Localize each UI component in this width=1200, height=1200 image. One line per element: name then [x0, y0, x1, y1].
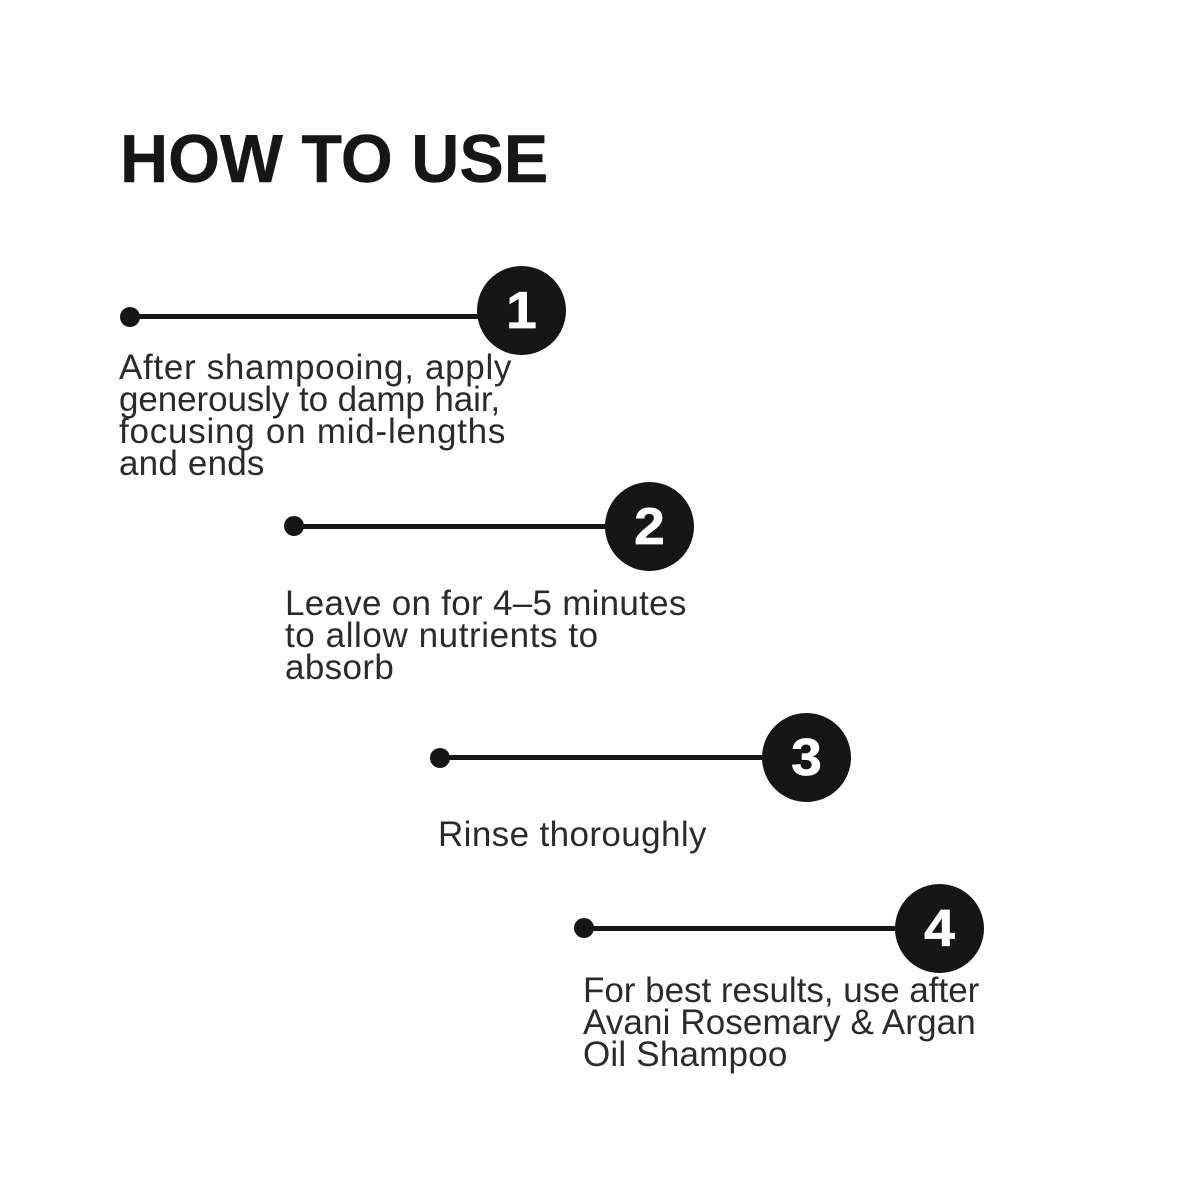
step 4 text: Oil Shampoo: [583, 1035, 788, 1074]
step 1 text: and ends: [119, 444, 265, 483]
step 1 number badge: 1: [506, 282, 537, 340]
step 2 number badge: 2: [634, 498, 665, 556]
step 2 line: [294, 524, 624, 529]
step 4 text: For best results, use after: [583, 971, 979, 1010]
step 2 text: to allow nutrients to: [285, 616, 599, 655]
step 3 connector: [430, 713, 851, 802]
step 3 number badge: 3: [791, 729, 822, 787]
step 4 number badge: 4: [924, 900, 955, 958]
step 4 dot: [574, 918, 594, 938]
step 1 text: focusing on mid-lengths: [119, 412, 506, 451]
step 2 dot: [284, 516, 304, 536]
step 4 line: [584, 926, 914, 931]
step 1 dot: [120, 307, 140, 327]
step 2 text: absorb: [285, 648, 394, 687]
step 4 connector: [574, 884, 984, 973]
step 3 number badge: [762, 713, 851, 802]
step 1 text: generously to damp hair,: [119, 380, 500, 419]
step 4 text: [583, 971, 979, 1074]
step 2 connector: [284, 482, 694, 571]
step 1 number badge: [477, 266, 566, 355]
step 1 text: [119, 348, 512, 483]
step 1 text: After shampooing, apply: [119, 348, 512, 387]
title: HOW TO USE: [120, 121, 548, 197]
step 3 text: Rinse thoroughly: [438, 815, 707, 854]
step 1 connector: [120, 266, 566, 355]
step 4 number badge: [895, 884, 984, 973]
step 4 text: Avani Rosemary & Argan: [583, 1003, 976, 1042]
step 2 number badge: [605, 482, 694, 571]
step 2 text: [285, 584, 687, 687]
step 1 line: [130, 314, 490, 319]
step 3 line: [440, 755, 765, 760]
step 2 text: Leave on for 4–5 minutes: [285, 584, 687, 623]
step 3 dot: [430, 748, 450, 768]
